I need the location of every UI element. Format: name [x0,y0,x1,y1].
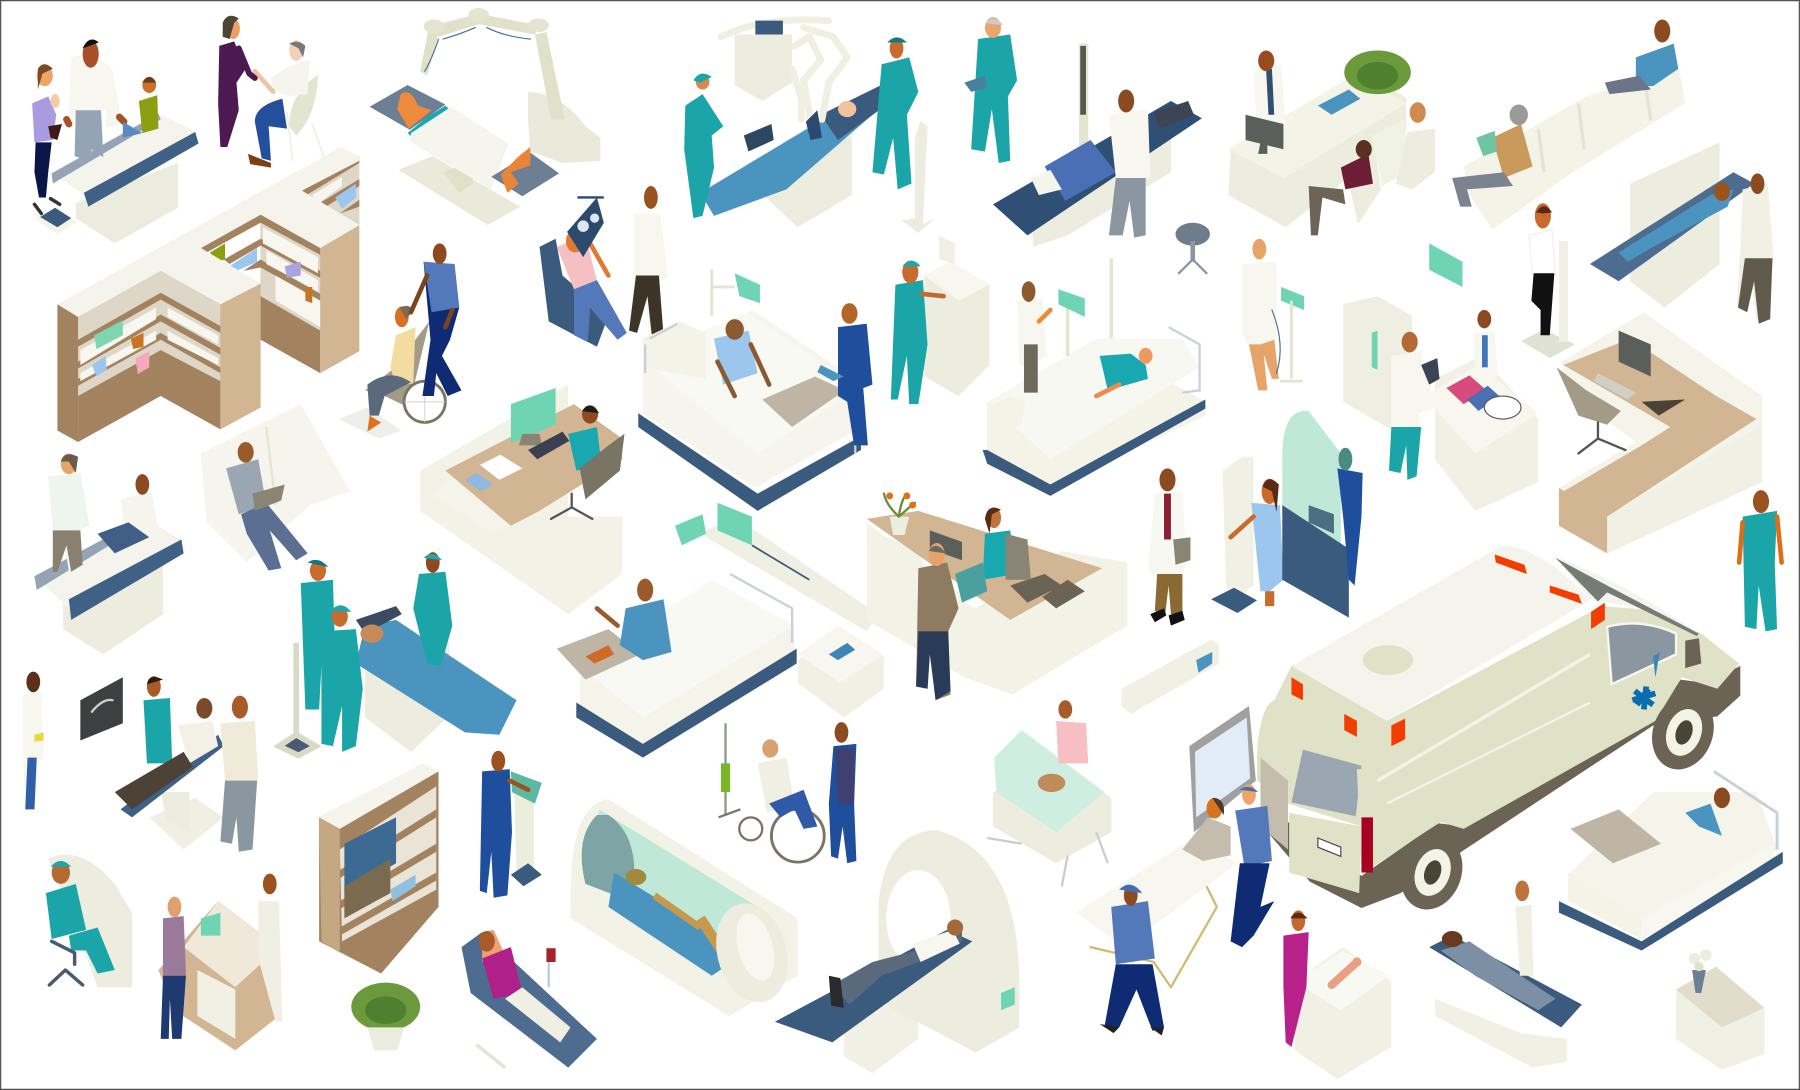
wheelchair patient and nurse with IV [719,722,856,863]
exam table with doctor and lying patient [1590,142,1774,324]
corner office desk with chair [1557,312,1762,553]
robotic imaging arm over table [370,8,600,225]
female doctor and x-ray panel [23,672,123,809]
paramedics with stretcher [1076,784,1274,1035]
eye examination chair and optometrist [540,186,668,347]
reception desk with doctor and visitors [1228,51,1435,235]
man using kiosk [480,751,542,898]
exam table with doctor and seated patient [34,453,184,654]
incubator with attendant [987,700,1111,886]
exam table with family and doctor [32,40,199,243]
treatment table with doctor and pole [993,44,1202,247]
wall-mounted panel [1122,639,1219,714]
ambulance wheels [1391,827,1473,918]
nurse in teal scrubs [1739,490,1782,631]
woman on scale [1521,203,1575,358]
hyperbaric chamber [570,799,798,1016]
floating monitor screen [1429,243,1462,287]
side table with vase [1676,949,1764,1070]
ambulance body [1257,606,1739,875]
pharmacy shelving unit [57,147,359,442]
waiting room seats with visitors [1452,20,1685,230]
rear doors of ambulance [1289,813,1361,893]
nurse with newborn in bassinet [1283,910,1391,1079]
patient bed bottom right [1559,771,1783,951]
nurse with tablet [964,17,1017,163]
patient with IV stand [1242,239,1304,390]
bed with seated man, tray and wall rail [557,503,884,758]
doctor at patient bed [983,258,1205,496]
robotic surgery team [684,20,936,233]
dental chair with patient and staff [115,676,258,852]
ambulance roof [1291,545,1590,721]
ambulance chassis [1263,666,1740,908]
rolling stool [1176,223,1210,273]
bed with seated patient and nurse [638,270,872,511]
surgical team and patient on lower table [279,552,517,755]
ambulance [1189,545,1740,918]
bookcase [319,763,439,973]
eye or dental scanner with seated technician [46,855,132,987]
MRI or CT scanner with patient [775,830,1019,1073]
woman at mammography machine [1211,457,1283,613]
potted plant [351,983,420,1050]
glass partition with woman behind [1282,411,1363,618]
nurse washing at sink [891,235,990,404]
patient on transfer gurney with attendant [1429,880,1582,1068]
doctor with clipboard [1148,468,1190,626]
phlebotomist and seated patient [218,16,327,168]
office desk with woman at computer [420,385,624,614]
reclining chair with patient [461,930,597,1068]
porter pushing patient in wheelchair [339,243,461,439]
reception desk with staff, visitor and flowers [867,492,1127,700]
waiting room chairs with seated man [201,404,350,571]
laboratory desk with scientists [1343,296,1538,511]
pharmacy cart with two staff [158,874,282,1050]
